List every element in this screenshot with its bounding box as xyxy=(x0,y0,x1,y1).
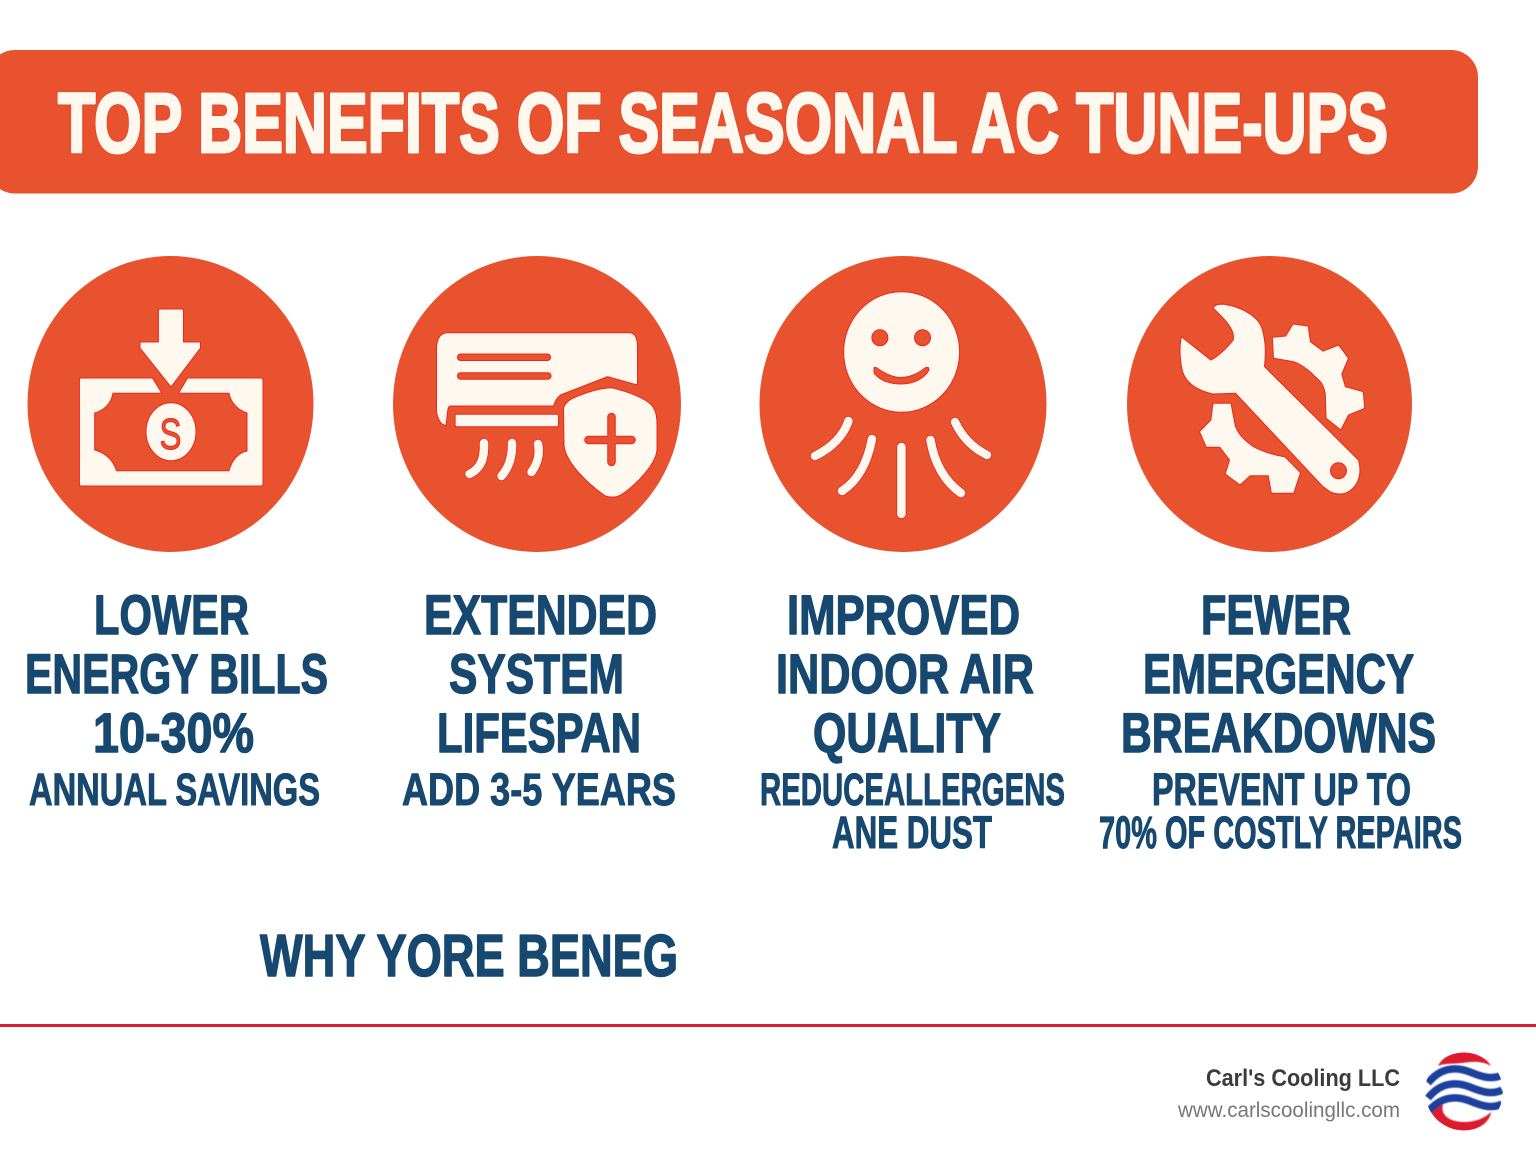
subtext: prevent costly repairs: PREVENT UP TO xyxy=(1152,764,1411,815)
heading: fewer emergency breakdowns: EMERGENCY xyxy=(1143,642,1414,705)
panel: lower energy bills xyxy=(25,256,328,815)
heading: extended system lifespan: EXTENDED xyxy=(424,583,657,646)
subtext: add 3-5 years: ADD 3-5 YEARS xyxy=(402,764,676,815)
subtext: reduce allergens xyxy=(760,764,1065,858)
panel: fewer emergency breakdowns xyxy=(1099,256,1462,858)
heading: fewer emergency breakdowns: BREAKDOWNS xyxy=(1121,701,1436,764)
heading: lower energy bills xyxy=(25,583,328,764)
subtext: reduce allergens: ANE DUST xyxy=(832,807,992,858)
subtext: annual savings: ANNUAL SAVINGS xyxy=(29,764,320,815)
heading: extended system lifespan: SYSTEM xyxy=(449,642,624,705)
icon: company logo xyxy=(1428,1052,1502,1131)
subtext: prevent costly repairs xyxy=(1099,764,1462,858)
footer website: www.carlscoolingllc.com xyxy=(1177,1099,1400,1122)
subtext: reduce allergens: REDUCEALLERGENS xyxy=(760,764,1065,815)
heading: lower energy bills: ENERGY BILLS xyxy=(25,642,328,705)
icon: money with down arrow: S xyxy=(160,410,182,459)
header banner xyxy=(0,50,1478,194)
heading: improved indoor air quality: QUALITY xyxy=(813,701,1001,764)
heading: improved indoor air quality xyxy=(776,583,1034,764)
heading: improved indoor air quality: INDOOR AIR xyxy=(776,642,1034,705)
heading: extended system lifespan xyxy=(424,583,657,764)
footer company name: Carl's Cooling LLC xyxy=(1206,1065,1400,1092)
heading: lower energy bills: 10-30% xyxy=(93,701,254,764)
icon: air conditioner with shield xyxy=(393,256,681,552)
icon: wrench and gear xyxy=(1127,256,1412,552)
heading: improved indoor air quality: IMPROVED xyxy=(787,583,1020,646)
heading: fewer emergency breakdowns xyxy=(1121,583,1436,764)
icon: money with down arrow xyxy=(28,256,314,552)
icon: smiling face with air rays xyxy=(760,256,1046,552)
heading: extended system lifespan: LIFESPAN xyxy=(437,701,641,764)
panel: improved indoor air quality xyxy=(760,256,1065,858)
bottom heading: WHY YORE BENEG xyxy=(260,923,678,989)
heading: fewer emergency breakdowns: FEWER xyxy=(1201,583,1351,646)
heading: lower energy bills: LOWER xyxy=(94,583,249,646)
panel: extended system lifespan xyxy=(393,256,681,815)
